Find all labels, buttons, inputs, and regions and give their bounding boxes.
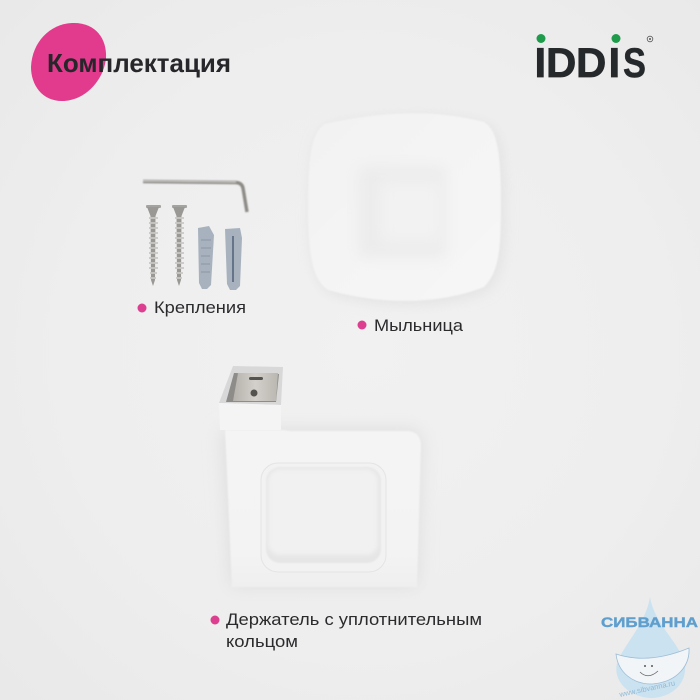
title: Комплектация [47,48,231,78]
plate [225,430,421,587]
anchor 1 [198,226,214,289]
window [261,463,386,572]
label: Держатель с уплотнительным кольцом: Держатель с уплотнительным [226,611,482,629]
bracket [219,366,283,430]
heading: Комплектация with pink blob [31,23,231,101]
anchor 2 [225,228,242,290]
label: Держатель с уплотнительным кольцом [210,611,482,651]
soap dish [308,113,504,304]
icon: pink blob [31,23,106,101]
icon: water drop with bath [616,597,685,698]
hex key [143,181,247,212]
label: Мыльница: Мыльница [374,317,464,335]
screw 2 [172,205,187,286]
wall anchors [198,226,242,290]
holder [219,366,421,587]
watermark: СИБВАННА: www.sibvanna.ru [618,678,676,699]
screw 1 [146,205,161,286]
watermark: СИБВАННА [601,597,698,699]
logo: IDDIS [534,34,653,87]
screws [146,205,187,286]
logo: IDDIS: S [623,40,646,87]
label: Держатель с уплотнительным кольцом: кольцом [226,633,298,651]
label: Крепления: Крепления [154,299,246,317]
holder shadow [222,430,421,586]
logo: IDDIS: IDDI [534,39,620,86]
watermark: СИБВАННА: СИБВАННА [601,614,698,630]
